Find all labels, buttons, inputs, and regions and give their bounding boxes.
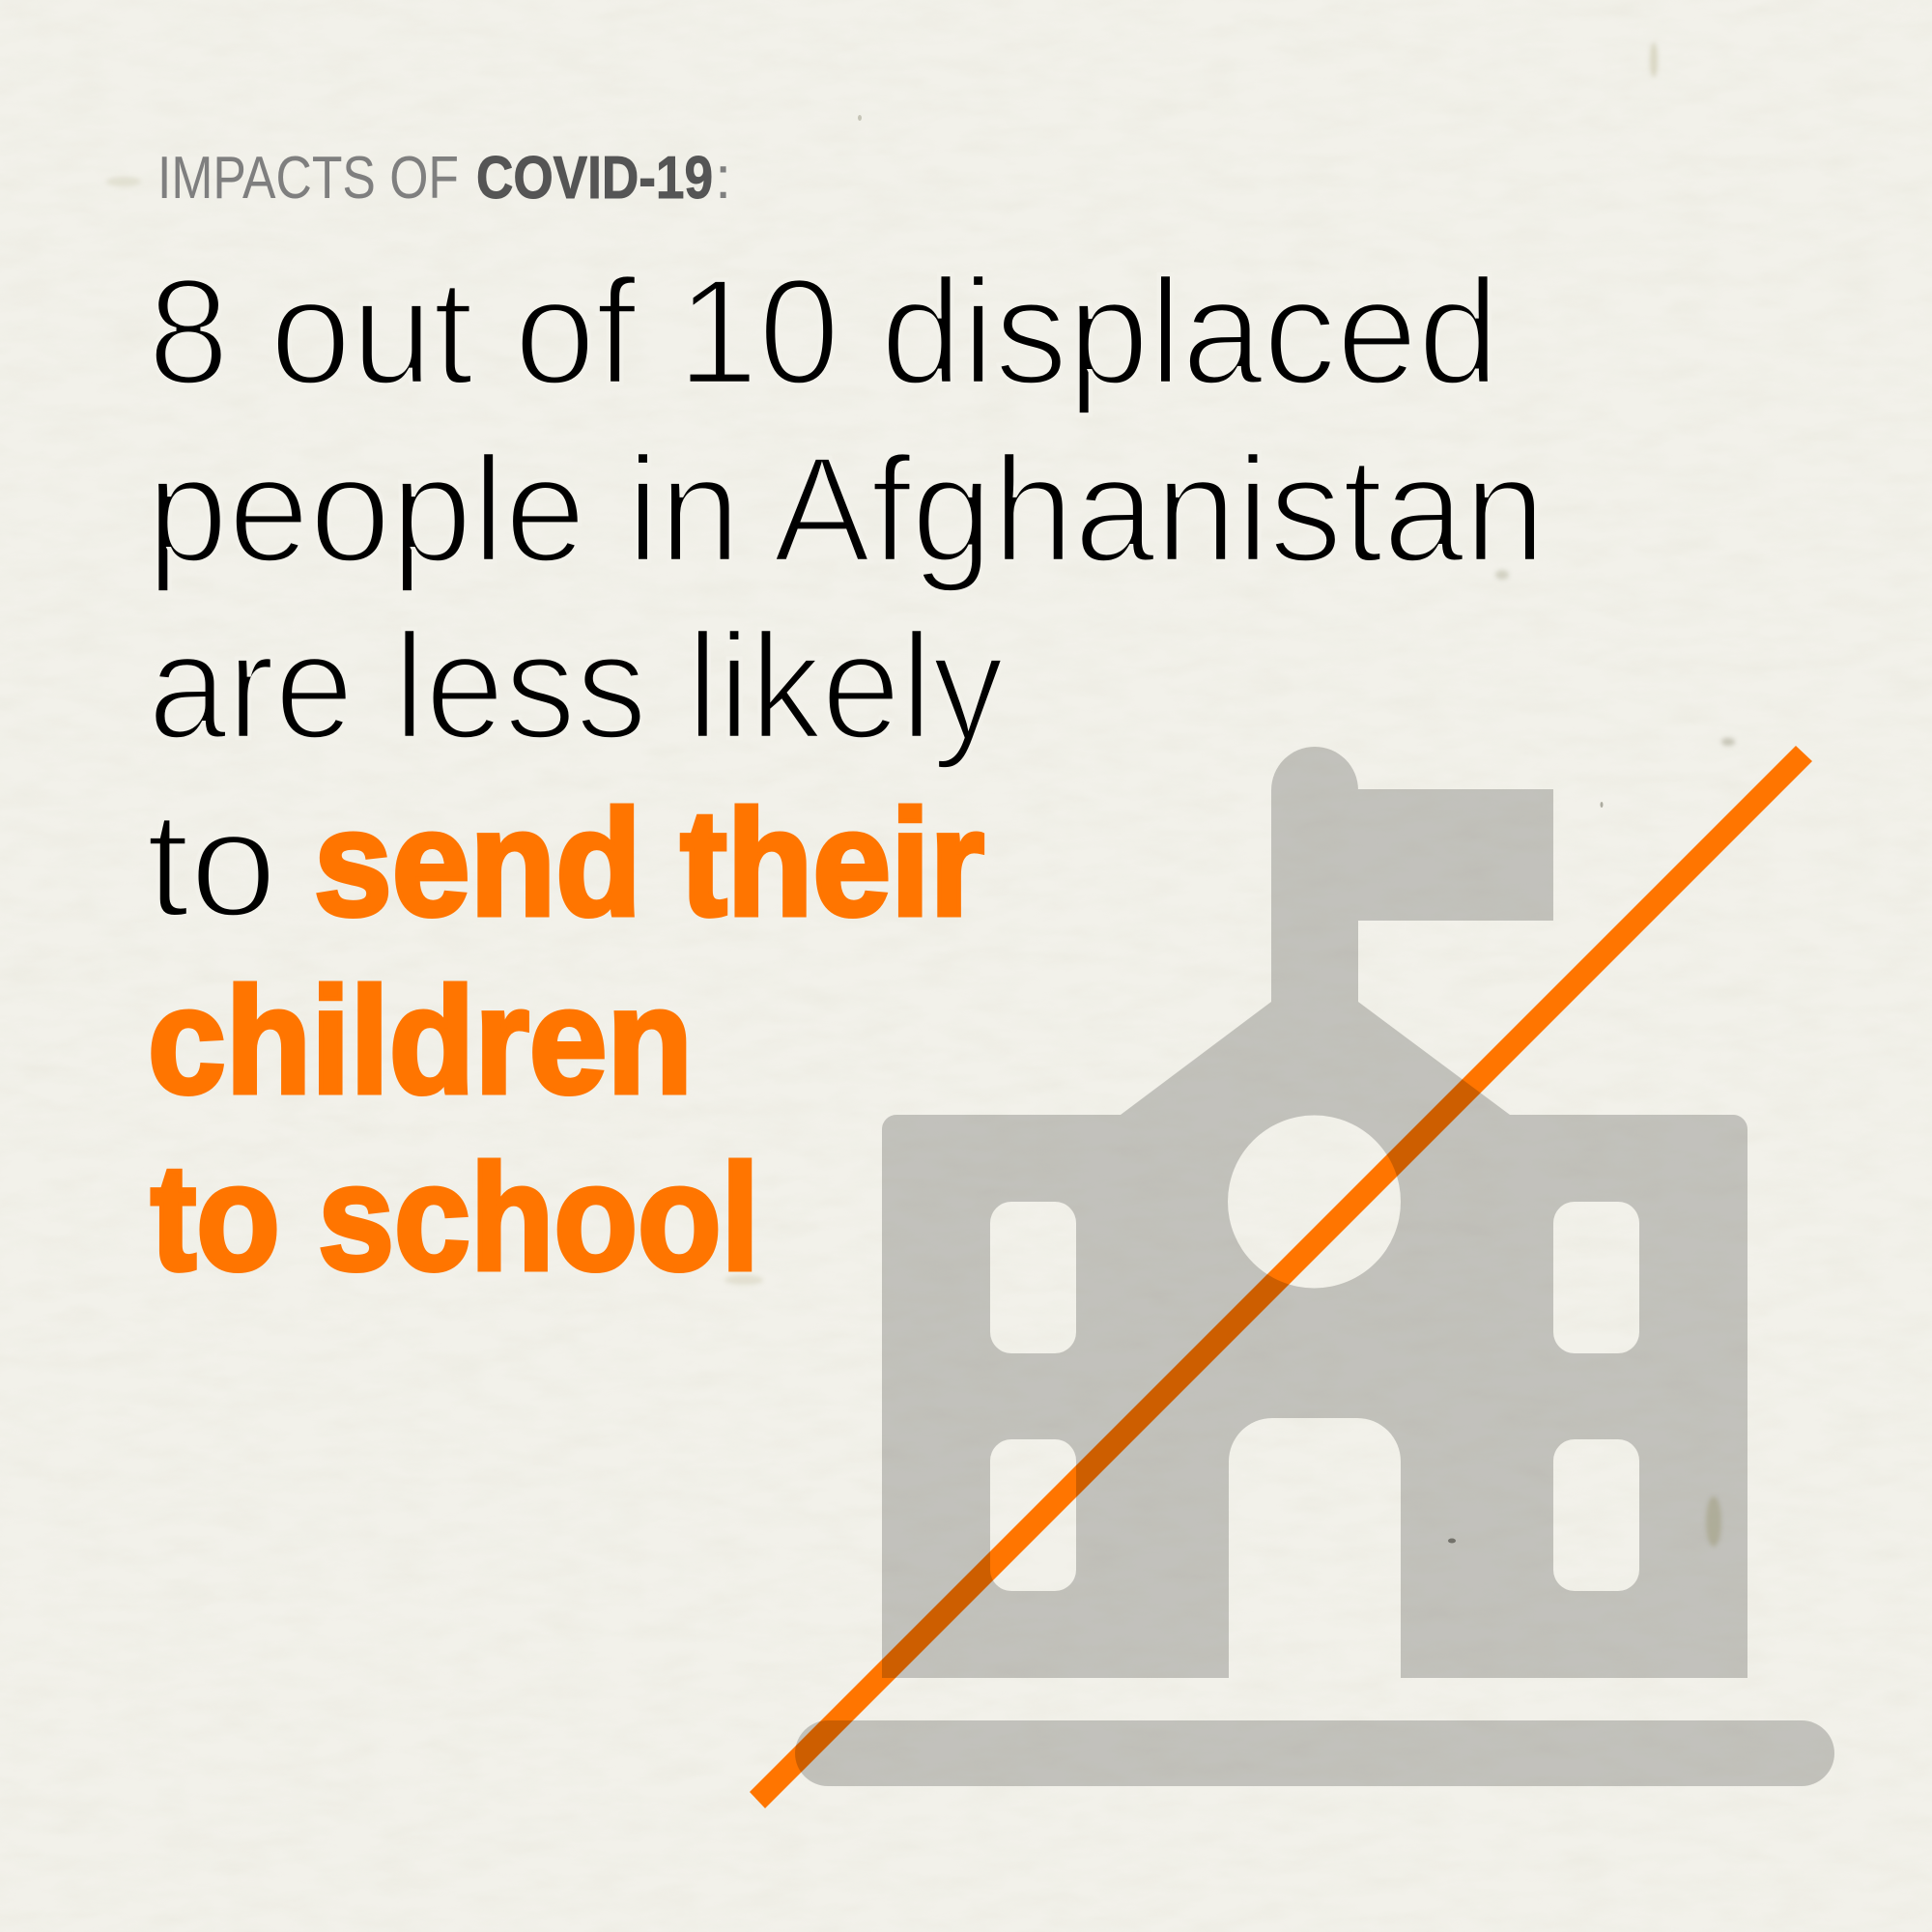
statement line 2: people in Afghanistan (147, 426, 1546, 594)
main statement (146, 248, 1546, 1302)
eyebrow: colon: : (715, 145, 731, 212)
highlighted phrase (148, 780, 984, 1302)
highlight: send their: send their (314, 780, 984, 948)
icon: school building (882, 747, 1747, 1678)
highlight: to school: to school (151, 1134, 759, 1302)
crossed-out school icon (750, 746, 1834, 1808)
eyebrow: covid-19: COVID-19 (476, 145, 713, 212)
statement line 1: 8 out of 10 displaced (148, 248, 1499, 416)
eyebrow heading (157, 145, 731, 212)
statement line 4 lead-in: to (146, 781, 277, 949)
eyebrow: impacts of: IMPACTS OF (157, 145, 459, 212)
statement line 3: are less likely (148, 603, 1004, 771)
strike-through line (750, 746, 1812, 1808)
icon: ground bar (795, 1720, 1834, 1786)
highlight: children: children (148, 957, 693, 1125)
